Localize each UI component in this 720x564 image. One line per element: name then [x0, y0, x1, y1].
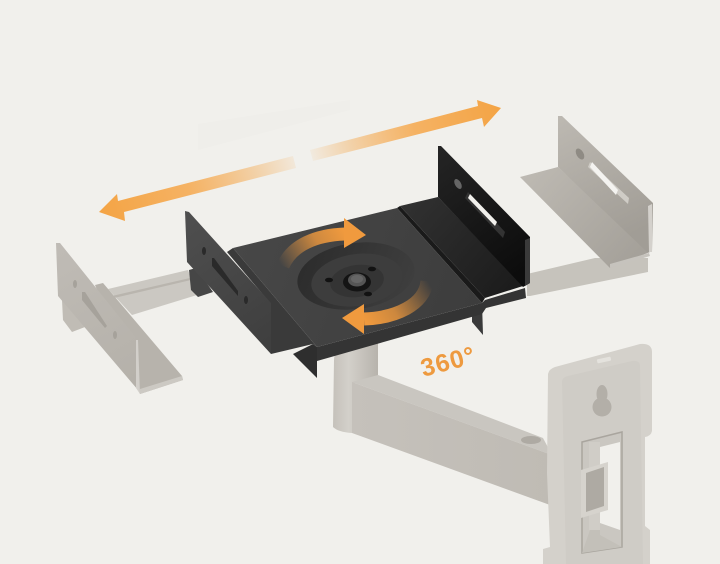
under tab: front	[293, 344, 317, 378]
under tab: rear left	[189, 268, 213, 297]
left rail	[62, 270, 197, 332]
right rail	[527, 258, 648, 296]
front lip	[317, 288, 526, 361]
main plate	[233, 208, 482, 347]
double-headed slide arrow	[99, 100, 501, 221]
black rotating tray	[185, 146, 530, 378]
left flange	[227, 248, 317, 354]
right wall slot	[453, 178, 505, 238]
left silver bracket	[56, 243, 183, 394]
wall plate	[543, 344, 652, 564]
under tab: rear right	[472, 303, 483, 335]
keyhole	[592, 385, 612, 416]
swivel arm and post	[333, 340, 552, 505]
rotation arrow: top	[283, 218, 366, 266]
left wall holes	[202, 247, 248, 304]
360 degree label: 360°	[418, 341, 479, 383]
deck underlay	[397, 206, 485, 303]
right deck	[400, 197, 523, 298]
right silver bracket	[520, 116, 653, 268]
left wall	[185, 211, 271, 354]
right wall	[438, 146, 530, 287]
rotation arrow: bottom	[342, 281, 427, 334]
rotating disc	[293, 235, 419, 317]
faint background smear	[198, 100, 350, 150]
